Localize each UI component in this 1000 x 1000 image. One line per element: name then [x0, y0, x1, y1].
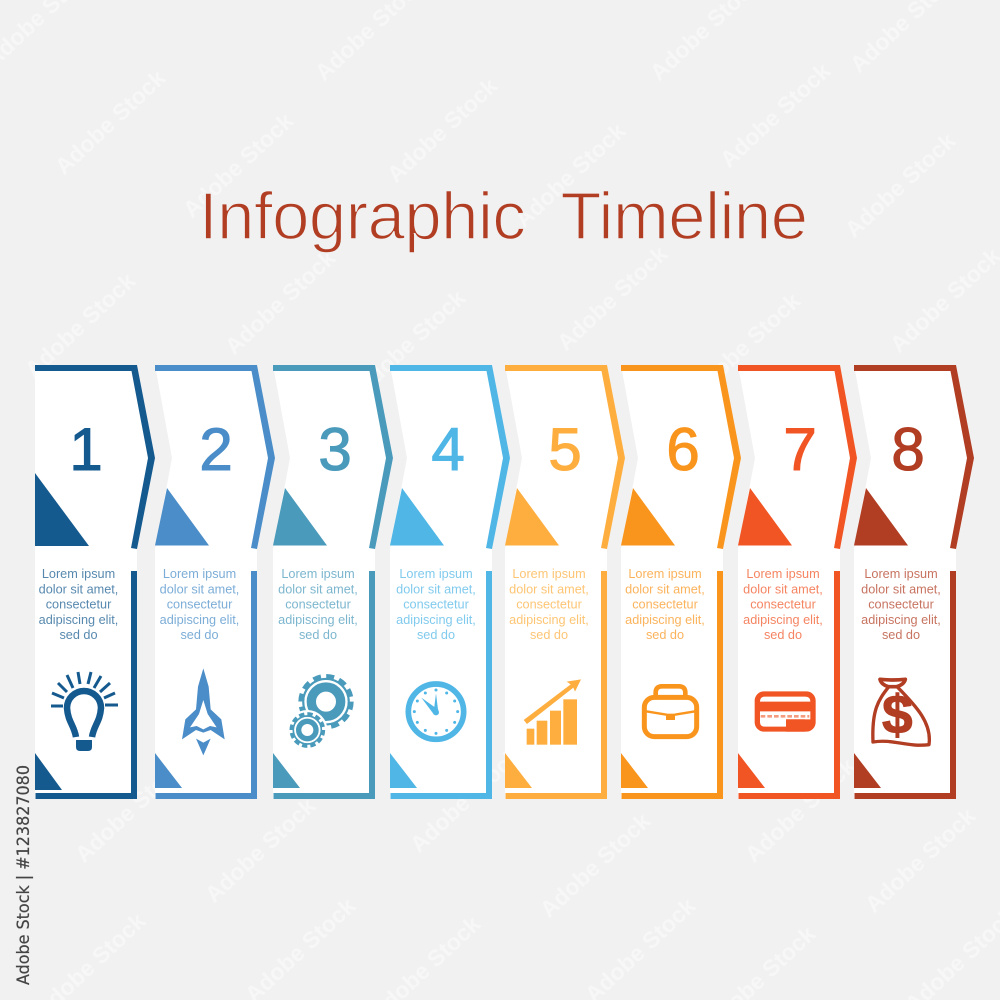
- panel: step 3: [273, 365, 393, 799]
- panel: step 1: dolor sit amet,: [39, 582, 118, 596]
- watermarks: Adobe Stock: [510, 117, 630, 232]
- panel: step 5: dolor sit amet,: [509, 582, 589, 596]
- panel: step 1: [35, 365, 155, 799]
- panel: step 5: 5: [548, 416, 582, 483]
- panel: step 2: [155, 365, 275, 799]
- panel: step 5: consectetur: [516, 598, 583, 612]
- watermarks: Adobe Stock: [178, 107, 298, 222]
- panel: step 3: adipiscing elit,: [278, 613, 358, 627]
- panel: step 2: consectetur: [167, 598, 233, 612]
- panel: step 4: 4: [431, 416, 465, 483]
- panel: step 5: adipiscing elit,: [509, 613, 589, 627]
- icon: growth chart: [524, 679, 581, 745]
- icon: clock: [408, 684, 464, 739]
- icon: rocket: [182, 668, 225, 755]
- watermarks: Adobe Stock: [535, 807, 655, 922]
- icon: light bulb: [51, 672, 118, 751]
- stock id side label: Adobe Stock | #123827080: [14, 765, 34, 985]
- panel: step 3: consectetur: [285, 598, 352, 612]
- panel: step 4: Lorem ipsum: [399, 567, 473, 581]
- panel: step 7: dolor sit amet,: [743, 582, 823, 596]
- panel: step 4: [390, 365, 510, 799]
- title: Infographic Timeline: [199, 179, 808, 254]
- panel: step 8: dolor sit amet,: [861, 582, 941, 596]
- panel: step 3: Lorem ipsum: [281, 567, 355, 581]
- panel: step 2: dolor sit amet,: [160, 582, 239, 596]
- watermarks: Adobe Stock: [552, 240, 672, 355]
- panel: step 2: Lorem ipsum: [163, 567, 236, 581]
- panel: step 6: sed do: [646, 628, 684, 642]
- panel: step 7: consectetur: [750, 598, 817, 612]
- watermarks: Adobe Stock: [685, 287, 805, 402]
- panel: step 3: 3: [318, 416, 352, 483]
- panel: step 1: adipiscing elit,: [39, 613, 118, 627]
- watermarks: Adobe Stock: [860, 802, 980, 917]
- panel: step 4: dolor sit amet,: [396, 582, 476, 596]
- panel: step 8: 8: [891, 416, 925, 483]
- panel: step 8: [854, 365, 974, 799]
- panel: step 3: sed do: [299, 628, 337, 642]
- panel: step 8: Lorem ipsum: [864, 567, 938, 581]
- panel: step 7: [738, 365, 857, 799]
- panel: step 2: sed do: [180, 628, 219, 642]
- panel: step 4: sed do: [417, 628, 455, 642]
- panel: step 1: consectetur: [46, 598, 112, 612]
- panel: step 6: Lorem ipsum: [628, 567, 702, 581]
- watermarks: Adobe Stock: [715, 57, 835, 172]
- watermarks: Adobe Stock: [20, 267, 140, 382]
- panel: step 2: adipiscing elit,: [160, 613, 239, 627]
- watermarks: Adobe Stock: [840, 127, 960, 242]
- panel: step 8: consectetur: [868, 598, 935, 612]
- panel: step 5: [505, 365, 625, 799]
- panel: step 6: [621, 365, 741, 799]
- panel: step 1: 1: [69, 416, 103, 483]
- watermarks: Adobe Stock: [70, 752, 190, 867]
- panel: step 3: dolor sit amet,: [278, 582, 358, 596]
- panel: step 7: Lorem ipsum: [746, 567, 820, 581]
- watermarks: Adobe Stock: [405, 742, 525, 857]
- icon: gears: [289, 676, 351, 749]
- panel: step 4: adipiscing elit,: [396, 613, 476, 627]
- panel: step 7: 7: [783, 416, 817, 483]
- watermarks: Adobe Stock: [350, 284, 470, 399]
- panel: step 5: sed do: [530, 628, 568, 642]
- panel: step 2: 2: [199, 416, 233, 483]
- icon: credit card: [755, 691, 816, 732]
- watermarks: Adobe Stock: [220, 244, 340, 359]
- panel: step 7: adipiscing elit,: [743, 613, 823, 627]
- panel: step 1: Lorem ipsum: [42, 567, 115, 581]
- watermarks: Adobe Stock: [382, 72, 502, 187]
- panel: step 6: dolor sit amet,: [625, 582, 705, 596]
- panel: step 8: sed do: [882, 628, 920, 642]
- panel: step 6: adipiscing elit,: [625, 613, 705, 627]
- panel: step 5: Lorem ipsum: [512, 567, 586, 581]
- panel: step 6: consectetur: [632, 598, 699, 612]
- panel: step 6: 6: [666, 416, 700, 483]
- panel: step 7: sed do: [764, 628, 802, 642]
- panel: step 8: adipiscing elit,: [861, 613, 941, 627]
- panel: step 1: sed do: [59, 628, 98, 642]
- watermarks: Adobe Stock: [740, 752, 860, 867]
- icon: money bag: [873, 679, 929, 746]
- icon: briefcase: [644, 686, 697, 737]
- watermarks: Adobe Stock: [200, 792, 320, 907]
- panel: step 4: consectetur: [403, 598, 470, 612]
- icon: money bag: $: [882, 684, 913, 746]
- watermarks: Adobe Stock: [50, 64, 170, 179]
